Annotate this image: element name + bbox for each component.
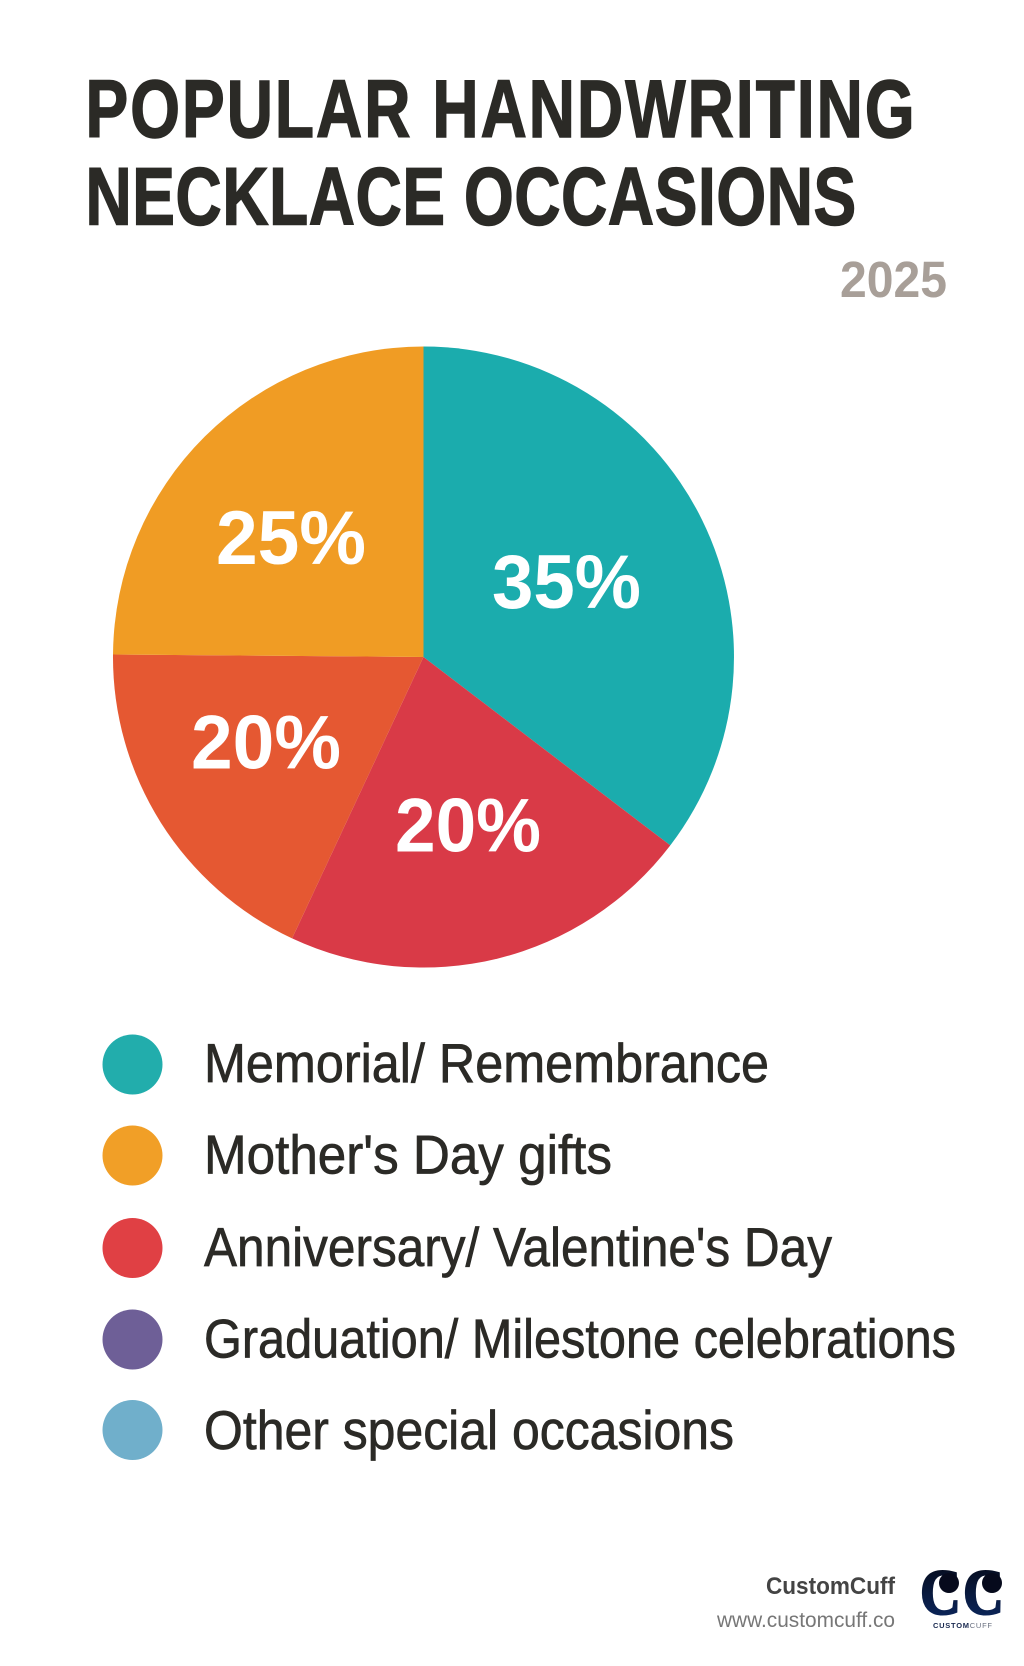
value labels: [191, 496, 641, 868]
title: POPULAR HANDWRITING: [86, 62, 915, 155]
slice: Anniversary 20%: [292, 657, 670, 968]
legend item: Anniversary / Valentine's Day: Anniversary/ Valentine's Day: [204, 1216, 832, 1278]
logo: [922, 1570, 1002, 1628]
legend item: Other special occasions: Other special occasions: [204, 1399, 734, 1461]
legend: [102, 1032, 956, 1461]
value labels: 35%: [492, 540, 641, 625]
title: NECKLACE OCCASIONS: [86, 150, 856, 242]
footer brand text: CustomCuff: [766, 1573, 896, 1600]
value labels: 20%: [191, 700, 341, 786]
logo: C: [920, 1557, 961, 1629]
footer brand text: [716, 1573, 896, 1632]
legend item: Memorial / Remembrance: Memorial/ Remembrance: [204, 1032, 769, 1094]
slice: Memorial 35%: [424, 346, 734, 845]
legend item: Mother's Day gifts: Mother's Day gifts: [204, 1124, 612, 1186]
value labels: 20%: [395, 784, 541, 868]
logo: C: [963, 1557, 1004, 1629]
value labels: 25%: [216, 496, 366, 581]
pie chart: [113, 346, 734, 968]
year label: 2025: [840, 251, 947, 308]
title: [86, 62, 915, 242]
footer brand text: www.customcuff.co: [716, 1609, 895, 1632]
slice: Mother's Day 25%: [113, 346, 424, 657]
logo: CUSTOMCUFF: [933, 1621, 992, 1630]
slice: orange 20%: [113, 654, 424, 938]
